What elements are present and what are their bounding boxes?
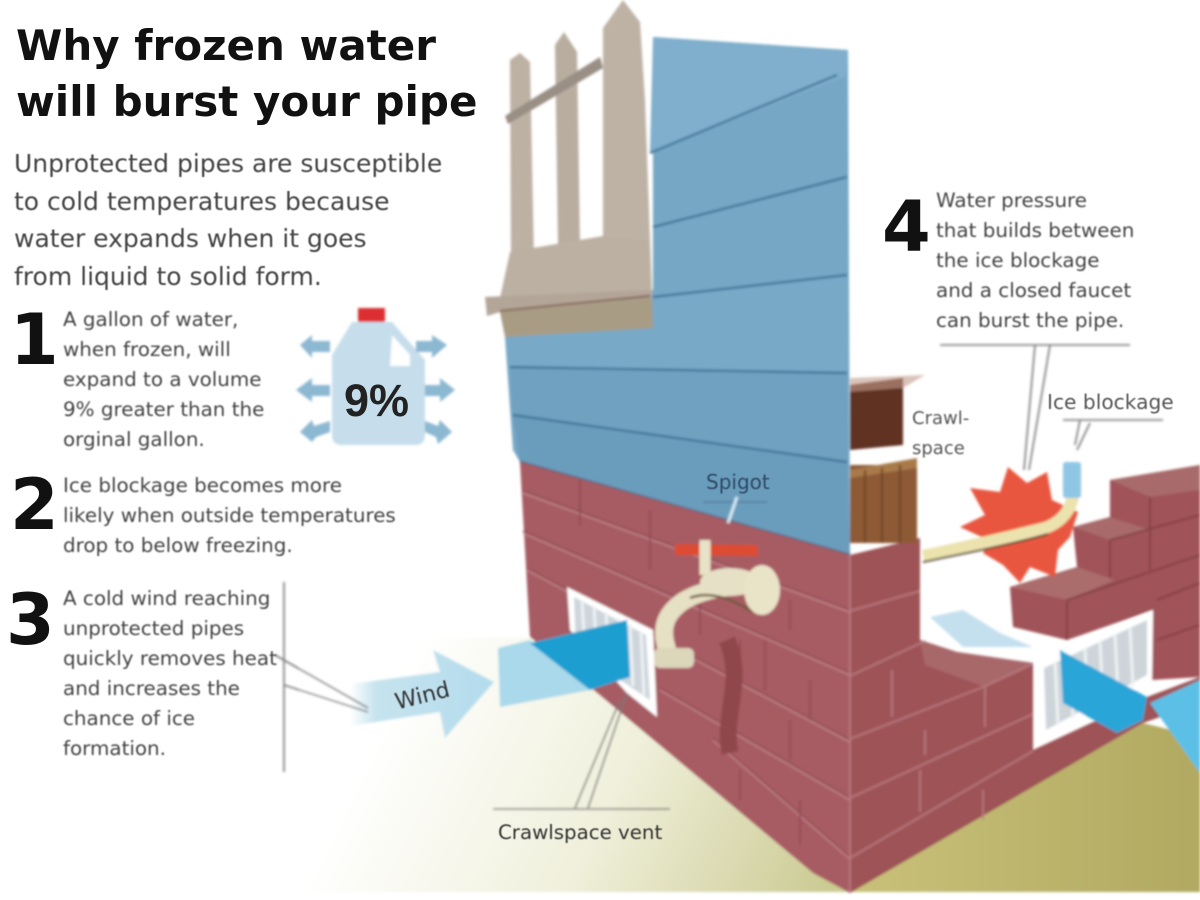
label: spigot: Spigot (706, 470, 770, 494)
step 3: A cold wind reaching (63, 587, 270, 610)
step 1: 1 (10, 299, 59, 381)
title: Why frozen water (16, 21, 436, 70)
step 4: 4 (882, 186, 931, 268)
step 3: quickly removes heat (63, 647, 277, 670)
label: crawlspace: Crawl- (912, 408, 969, 429)
intro text: to cold temperatures because (14, 186, 390, 216)
label: crawlspace (912, 408, 970, 459)
step 1: 9% greater than the (63, 398, 264, 421)
label: ice blockage: Ice blockage (1047, 390, 1174, 414)
step 3: unprotected pipes (63, 617, 244, 640)
step 2: drop to below freezing. (63, 534, 293, 557)
step 4: can burst the pipe. (936, 309, 1124, 332)
step 4 (882, 186, 1134, 332)
step 2: Ice blockage becomes more (63, 474, 342, 497)
step 3: formation. (63, 737, 166, 760)
step 3 (6, 579, 278, 760)
step 3: chance of ice (63, 707, 195, 730)
vent right (1037, 610, 1153, 740)
right brick stack (1010, 465, 1200, 680)
title (16, 21, 477, 126)
spigot (654, 540, 780, 753)
step 1: expand to a volume (63, 368, 262, 391)
step 1: A gallon of water, (63, 308, 238, 331)
window (485, 0, 653, 337)
wind arrow (350, 610, 1200, 773)
step 2 (10, 464, 396, 557)
gallon jug (296, 308, 455, 445)
leader lines (275, 345, 1163, 809)
title: will burst your pipe (16, 77, 477, 126)
step 4: that builds between (936, 219, 1134, 242)
step 1: when frozen, will (63, 338, 231, 361)
step 1: orginal gallon. (63, 428, 205, 451)
intro text: from liquid to solid form. (14, 262, 322, 290)
brick pillar and wood post (850, 375, 925, 543)
label: crawlspace vent: Crawlspace vent (498, 821, 662, 844)
step 4: Water pressure (936, 189, 1087, 212)
burst (923, 462, 1081, 583)
step 3: and increases the (63, 677, 240, 700)
ground (300, 637, 1200, 892)
intro text (14, 149, 442, 291)
blue siding wall (505, 37, 850, 555)
brick wall left face (520, 462, 850, 893)
step 4: and a closed faucet (936, 279, 1131, 302)
vent left (567, 587, 657, 717)
intro text: water expands when it goes (14, 224, 367, 253)
label: wind: Wind (393, 678, 452, 715)
step 1 (10, 299, 264, 451)
brick wall right face (850, 538, 1200, 893)
step 4: the ice blockage (936, 249, 1099, 272)
jug label: 9% (344, 375, 409, 426)
label: crawlspace: space (912, 438, 965, 459)
step 2: 2 (10, 464, 59, 546)
step 3: 3 (6, 579, 55, 661)
intro text: Unprotected pipes are susceptible (14, 149, 442, 178)
step 2: likely when outside temperatures (63, 504, 396, 527)
